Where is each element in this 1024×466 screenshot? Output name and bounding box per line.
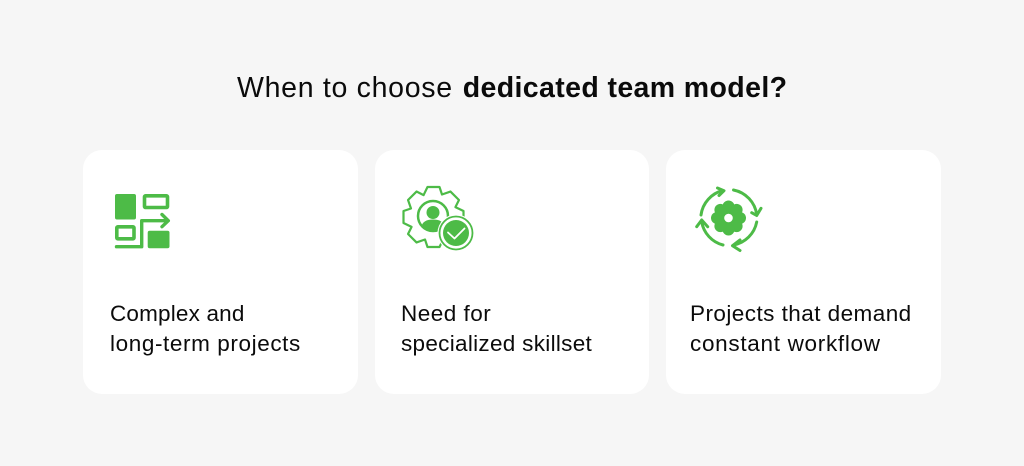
panel: specialized skillset	[375, 150, 649, 394]
text: complex projects: Complex and	[110, 301, 245, 326]
icon: gear with person and check	[404, 187, 474, 252]
icon: cycle gear	[697, 188, 761, 250]
text: constant workflow: constant workflow	[690, 331, 881, 356]
title: When to choose dedicated team model?	[237, 72, 787, 104]
panel: constant workflow	[666, 150, 941, 394]
text: specialized skillset: Need for	[401, 301, 491, 326]
text: specialized skillset	[401, 301, 592, 356]
text: complex projects: long-term projects	[110, 331, 301, 356]
icon: kanban flow	[115, 194, 170, 248]
panel: complex projects	[83, 150, 358, 394]
text: constant workflow: Projects that demand	[690, 301, 912, 326]
text: constant workflow	[690, 301, 912, 356]
text: complex projects	[110, 301, 301, 356]
text: specialized skillset: specialized skillset	[401, 331, 592, 356]
